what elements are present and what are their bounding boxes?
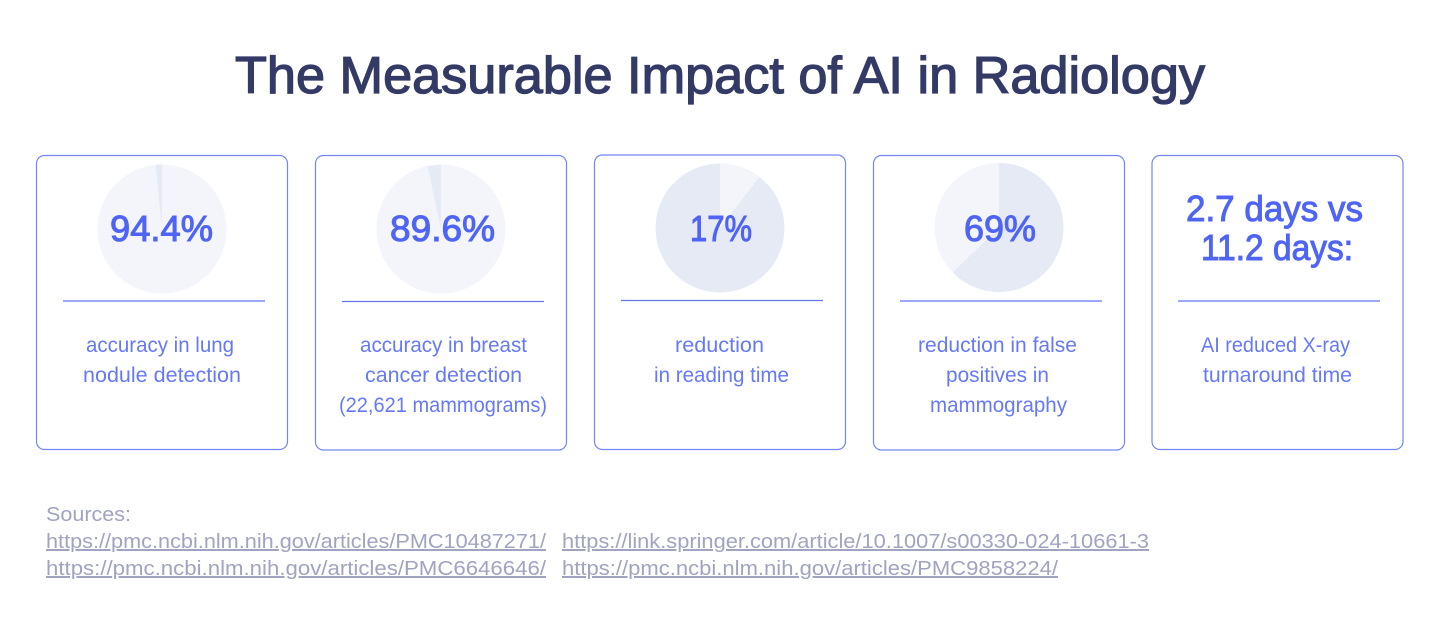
description: AI reduced X-ray xyxy=(1201,334,1350,357)
value: 2.7 days vs 11.2 days: 11.2 days: xyxy=(1201,227,1353,268)
description: nodule detection xyxy=(83,364,241,387)
description: reduction in false xyxy=(918,334,1077,357)
value: 69%: 69% xyxy=(964,208,1036,249)
description xyxy=(1201,334,1352,387)
description: in reading time xyxy=(654,364,789,387)
value: 2.7 days vs 11.2 days xyxy=(1186,188,1363,268)
description: accuracy in breast xyxy=(360,334,527,357)
panel: reading time reduction xyxy=(594,155,846,450)
description: reduction xyxy=(675,334,764,357)
panel: breast cancer accuracy xyxy=(316,156,566,450)
sources: https://pmc.ncbi.nlm.nih.gov/articles/PMC6646646/ xyxy=(46,558,546,580)
panel: lung nodule accuracy xyxy=(36,156,288,450)
sources: https://link.springer.com/article/10.1007/s00330-024-10661-3 xyxy=(562,531,1149,553)
description: cancer detection xyxy=(365,364,522,387)
panel: X-ray turnaround xyxy=(1152,156,1403,450)
value: 94.4%: 94.4% xyxy=(110,208,213,249)
sources xyxy=(46,504,1149,580)
description: turnaround time xyxy=(1203,364,1352,387)
pie chart: 17% xyxy=(656,164,784,292)
description: mammography xyxy=(930,394,1067,417)
value: 89.6%: 89.6% xyxy=(390,208,495,249)
description: accuracy in lung xyxy=(86,334,234,357)
sources: https://pmc.ncbi.nlm.nih.gov/articles/PMC9858224/ xyxy=(562,558,1058,580)
description xyxy=(918,334,1077,417)
value: 17%: 17% xyxy=(690,208,752,249)
pie chart: 89.6% xyxy=(376,164,506,294)
description xyxy=(339,334,547,417)
title: The Measurable Impact of AI in Radiology xyxy=(235,47,1205,105)
sources: https://pmc.ncbi.nlm.nih.gov/articles/PMC10487271/ xyxy=(46,531,546,553)
pie chart: 94.4% xyxy=(98,164,226,294)
pie chart: 69% xyxy=(934,163,1064,292)
sources: Sources: xyxy=(46,504,131,526)
description xyxy=(83,334,241,387)
panel: false positives reduction xyxy=(874,156,1124,450)
description xyxy=(654,334,789,387)
value: 2.7 days vs 11.2 days: 2.7 days vs xyxy=(1186,188,1363,229)
description: (22,621 mammograms) xyxy=(339,394,547,417)
description: positives in xyxy=(946,364,1049,387)
